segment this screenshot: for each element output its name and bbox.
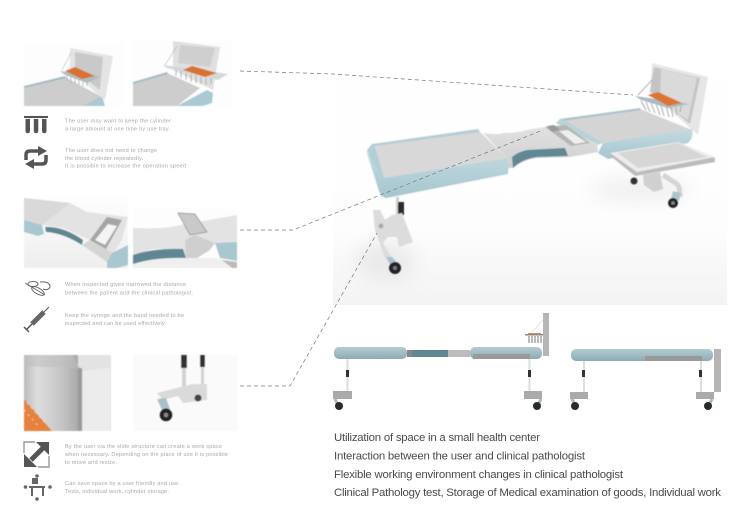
left bed board (366, 129, 508, 198)
text: work space benefit: to move and resize. (65, 460, 117, 466)
thumbnail: wheel base (133, 355, 238, 431)
main render: bed with folded panel (333, 50, 727, 305)
text: distance benefit: When inspected gives narrowed the distance (65, 282, 186, 288)
text: repeat benefit (65, 148, 186, 170)
icon: workstation (24, 474, 52, 501)
text: work space benefit: when necessary. Depending on the place of use it is possible (64, 452, 228, 458)
icon: test tubes (24, 116, 48, 133)
text: space saving benefit: Tests, individual work, cylinder storage. (65, 489, 169, 495)
key points text: Utilization of space in a small health center (334, 432, 540, 444)
pull-out shelf (608, 142, 715, 176)
thumbnail: panel close-up (24, 355, 111, 431)
text: tray benefit: a large amount at one time by use tray. (65, 126, 170, 132)
key points text: Flexible working environment changes in clinical pathologist (334, 469, 624, 481)
dashed connector: tray (240, 71, 633, 95)
thumbnail: tray on bed, left view (24, 44, 124, 106)
text: tray benefit (65, 118, 171, 132)
right wheel base (630, 172, 681, 208)
text: syringe benefit: inspected and can be used effectively. (65, 321, 166, 327)
thumbnail: narrowed middle section (24, 193, 128, 268)
narrowed centre section (483, 125, 598, 168)
key points text: Clinical Pathology test, Storage of Medical examination of goods, Individual work (334, 487, 721, 499)
text: work space benefit (64, 444, 228, 466)
sample tray with tubes (635, 80, 690, 117)
text: syringe benefit (65, 313, 184, 327)
text: space saving benefit (65, 481, 180, 495)
key points text: Interaction between the user and clinical pathologist (334, 450, 586, 462)
right bed board (556, 108, 692, 159)
text: repeat benefit: The user does not need to change (65, 148, 157, 154)
key points text (334, 432, 721, 499)
dashed connector: wheel base (240, 233, 377, 386)
text: repeat benefit: It is possible to increase the operation speed (65, 164, 186, 170)
icon: syringe (24, 307, 49, 332)
icon: repeat arrows (25, 146, 47, 169)
text: syringe benefit: Keep the syringe and the band needed to be (65, 313, 184, 319)
text: distance benefit: between the patient and the clinical pathologist. (65, 290, 193, 296)
text: work space benefit: By the user via the slide structure can create a work space (65, 444, 222, 450)
thumbnail: tray on bed, right view (133, 41, 233, 106)
folded back panel (650, 63, 708, 135)
text: space saving benefit: Can save space by a user friendly and use. (65, 481, 180, 487)
icon: tourniquet band (25, 282, 50, 297)
icon: resize arrows (24, 442, 49, 467)
left leg and wheel base (373, 197, 413, 274)
side view: open configuration (333, 313, 549, 410)
dashed connector: middle section (240, 130, 543, 230)
text: tray benefit: The user may want to keep the cylinder (65, 118, 171, 124)
side view: folded configuration (570, 349, 721, 410)
text: distance benefit (65, 282, 193, 296)
thumbnail: lifted side tray (133, 208, 237, 268)
text: repeat benefit: the blood cylinder repeatedly. (65, 156, 143, 162)
